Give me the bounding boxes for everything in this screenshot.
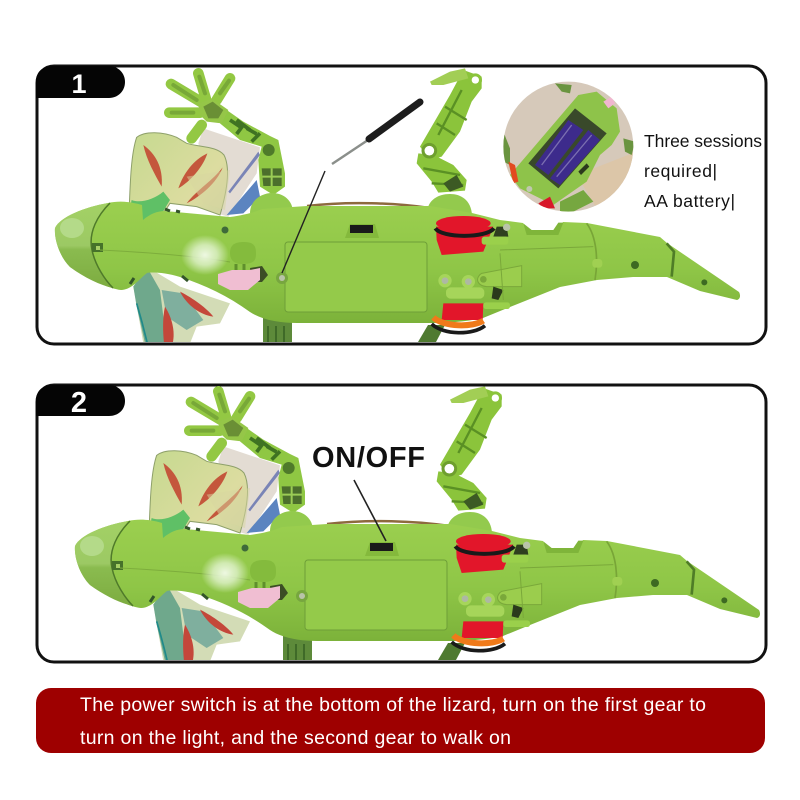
step tag 2: 2 bbox=[71, 387, 87, 419]
step tag 1 bbox=[36, 66, 125, 99]
panel 1 frame bbox=[37, 66, 766, 344]
arrow: to power switch bbox=[354, 480, 386, 541]
inset: battery compartment bbox=[500, 80, 637, 217]
step tag 1: 1 bbox=[71, 69, 87, 99]
icon: screwdriver bbox=[282, 102, 420, 273]
battery note: Three sessions bbox=[644, 131, 762, 151]
caption text: The power switch is at the bottom of the lizard, turn on the first gear to bbox=[80, 694, 706, 716]
panel 2 bbox=[36, 385, 766, 662]
lizard toy, panel 1 bbox=[55, 68, 740, 343]
step tag 2 bbox=[36, 385, 125, 419]
lizard toy, panel 2 bbox=[75, 386, 760, 661]
caption text: turn on the light, and the second gear to walk on bbox=[80, 727, 511, 749]
battery note: AA battery| bbox=[644, 191, 735, 211]
ON/OFF label: ON/OFF bbox=[312, 442, 425, 474]
caption banner bbox=[36, 688, 765, 753]
infographic canvas bbox=[36, 64, 768, 753]
panel 1 bbox=[36, 66, 766, 344]
battery note: required| bbox=[644, 161, 717, 181]
panel 2 frame bbox=[37, 385, 766, 662]
